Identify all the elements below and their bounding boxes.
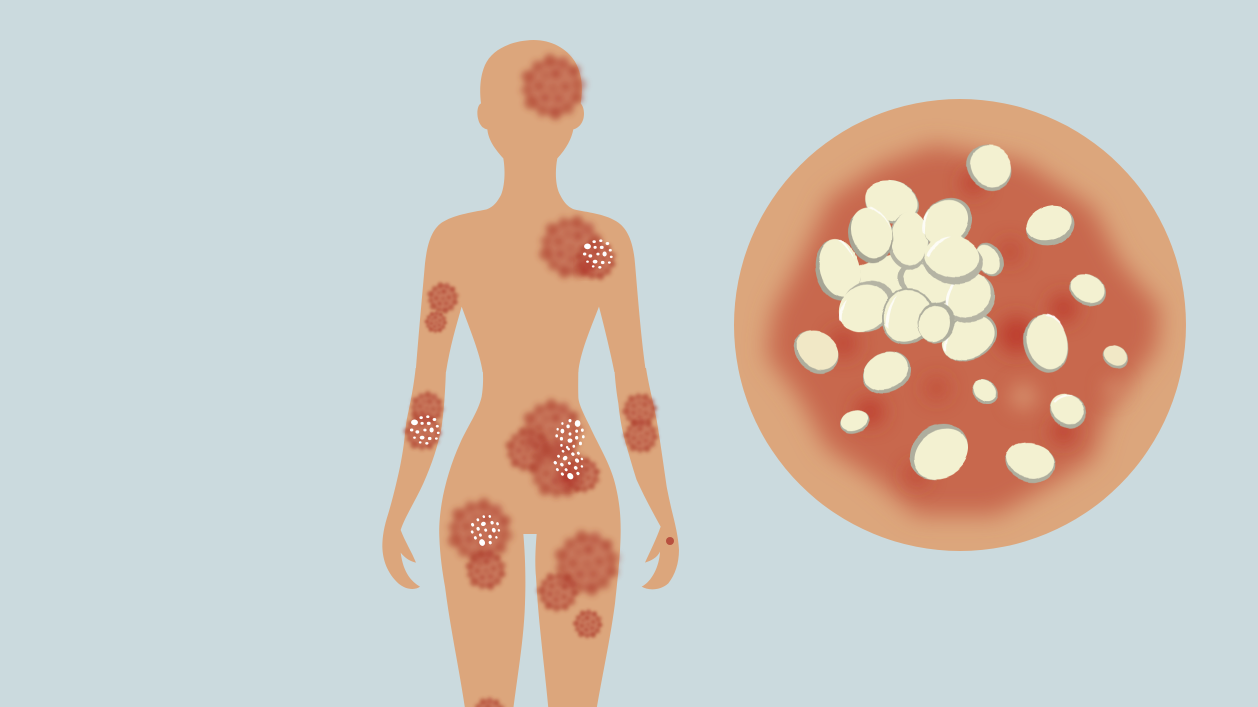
pustule xyxy=(829,270,904,343)
plaques: right forearm xyxy=(615,385,665,453)
plaque: hand xyxy=(666,537,674,545)
plaques: scalp xyxy=(510,44,595,129)
pustule xyxy=(938,266,1003,330)
pustule xyxy=(1020,198,1081,253)
pustule xyxy=(913,188,983,257)
pustule xyxy=(911,296,961,347)
pustule xyxy=(1097,342,1131,372)
plaques: hip xyxy=(499,388,608,501)
pustule base xyxy=(850,252,983,328)
plaques: left forearm xyxy=(403,384,450,451)
pustule xyxy=(1043,388,1093,434)
pustule xyxy=(934,305,1005,371)
pustule xyxy=(838,407,872,438)
pustule dots: thigh xyxy=(467,511,505,549)
lower body xyxy=(382,368,679,707)
pustule xyxy=(1017,309,1075,378)
pustule layer xyxy=(785,137,1131,491)
pustule xyxy=(872,281,943,353)
pustule xyxy=(808,235,867,306)
body silhouette xyxy=(382,40,679,707)
pustule xyxy=(1064,269,1111,312)
pustule dots: shoulder xyxy=(583,239,613,269)
pustule xyxy=(855,344,919,402)
pustule xyxy=(841,201,900,269)
plaques: shoulder xyxy=(526,201,620,292)
plaques: left thigh xyxy=(433,484,526,594)
pustule xyxy=(971,238,1009,282)
upper body xyxy=(416,40,646,372)
plaques: upper arm xyxy=(423,278,462,333)
pustule xyxy=(785,323,848,383)
plaques: right thigh xyxy=(530,522,627,639)
pustule xyxy=(889,213,930,270)
pustule dots: hip upper xyxy=(555,419,585,449)
pustule xyxy=(921,231,987,288)
pustule xyxy=(957,137,1021,198)
pustule dots: hip lower xyxy=(549,443,590,484)
pustule xyxy=(892,254,959,312)
pustule xyxy=(860,174,925,232)
illustration scene xyxy=(382,40,1186,707)
pustule dots: forearm xyxy=(410,415,440,445)
skin disc xyxy=(734,99,1186,551)
pustule cluster xyxy=(808,174,1009,371)
pustule xyxy=(898,412,979,491)
pustule xyxy=(968,375,1003,409)
pustule xyxy=(1002,438,1058,486)
magnified skin circle xyxy=(734,99,1186,551)
inflammation xyxy=(767,145,1160,515)
plaque: lower leg xyxy=(472,697,506,707)
